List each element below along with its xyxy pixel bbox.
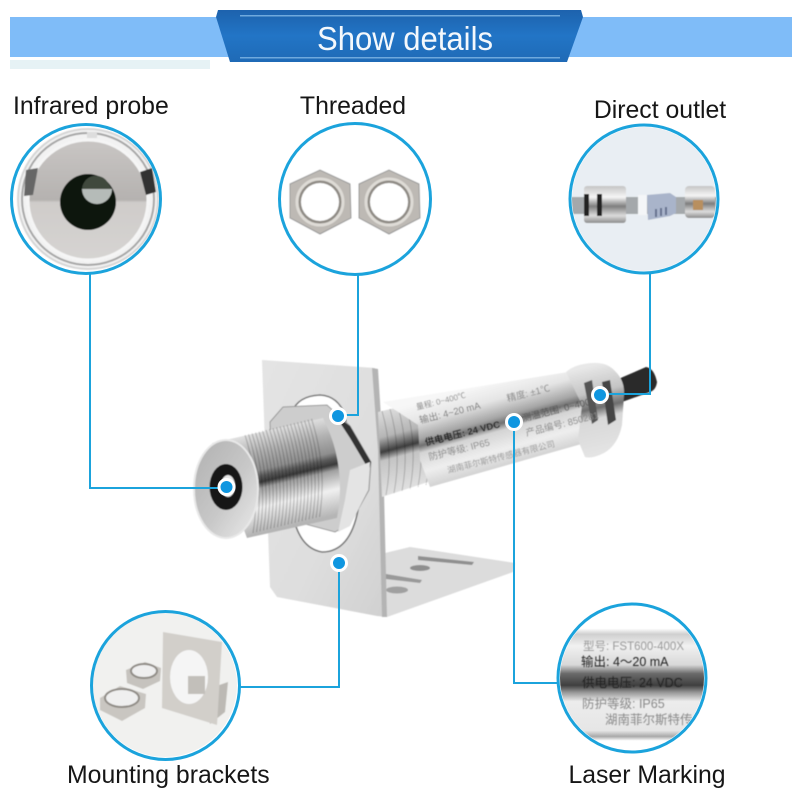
leader line (514, 422, 558, 683)
leader line (338, 274, 358, 415)
callout: laser marking (506, 414, 726, 789)
marker dot (592, 388, 608, 402)
inset: bracket and nuts (92, 612, 238, 758)
laser text on body: 供电电压: 24 VDC (424, 418, 501, 449)
leader line (240, 563, 339, 687)
inset: laser marked text: 输出: 4～20 mA (581, 654, 669, 669)
inset: cable gland parts (570, 126, 720, 272)
laser text on body (415, 361, 604, 479)
laser text on body: 精度: ±1℃ (505, 382, 552, 405)
inset: laser marked text: 防护等级: IP65 (582, 696, 665, 711)
front face (194, 440, 258, 538)
label: laser marking: Laser Marking (568, 762, 726, 789)
inset: laser marked text: 湖南菲尔斯特传 (605, 712, 693, 727)
ring (570, 125, 718, 273)
inset: laser marked text: 供电电压: 24 VDC (582, 676, 683, 690)
label: direct outlet: Direct outlet (594, 97, 726, 124)
ring (280, 124, 430, 274)
ring (92, 612, 240, 760)
marker dot (219, 480, 234, 494)
laser text on body: 输出: 4~20 mA (418, 399, 482, 426)
inset: probe face (13, 126, 159, 272)
label: threaded: Threaded (300, 93, 406, 120)
body tube (383, 372, 588, 487)
label: mounting brackets: Mounting brackets (67, 762, 270, 789)
leader line (600, 274, 650, 394)
heading: Show details (317, 20, 493, 57)
marker dot (506, 414, 522, 430)
marker dot (332, 556, 346, 570)
laser text on body: 产品编号: 850281 (524, 409, 600, 439)
callout: direct outlet (570, 97, 726, 402)
laser text on body: 测温范围: 0~400 (521, 396, 591, 425)
cable gland (566, 363, 624, 458)
laser text on body: 量程: 0~400℃ (415, 391, 467, 412)
inset: hex nuts (289, 169, 421, 235)
rear thread (378, 403, 428, 497)
sensor product photo (194, 360, 657, 617)
callout: mounting brackets (67, 556, 346, 789)
inset: laser marked text: 型号: FST600-400X (583, 639, 684, 653)
ribbon (216, 10, 583, 62)
mounting bracket (262, 360, 515, 617)
label: infrared probe: Infrared probe (13, 93, 169, 120)
callout: infrared probe (12, 93, 234, 494)
front threaded barrel (212, 418, 340, 538)
inset: laser marked text (560, 630, 704, 740)
hex nut (270, 405, 371, 532)
laser text on body: 湖南菲尔斯特传感器有限公司 (446, 439, 556, 475)
ring (558, 604, 706, 752)
leader line (90, 274, 226, 488)
laser text on body: 防护等级: IP65 (427, 436, 491, 463)
header banner (10, 10, 792, 69)
cable (616, 367, 657, 402)
ring (12, 124, 160, 274)
marker dot (330, 408, 346, 424)
callout: threaded (280, 93, 430, 424)
